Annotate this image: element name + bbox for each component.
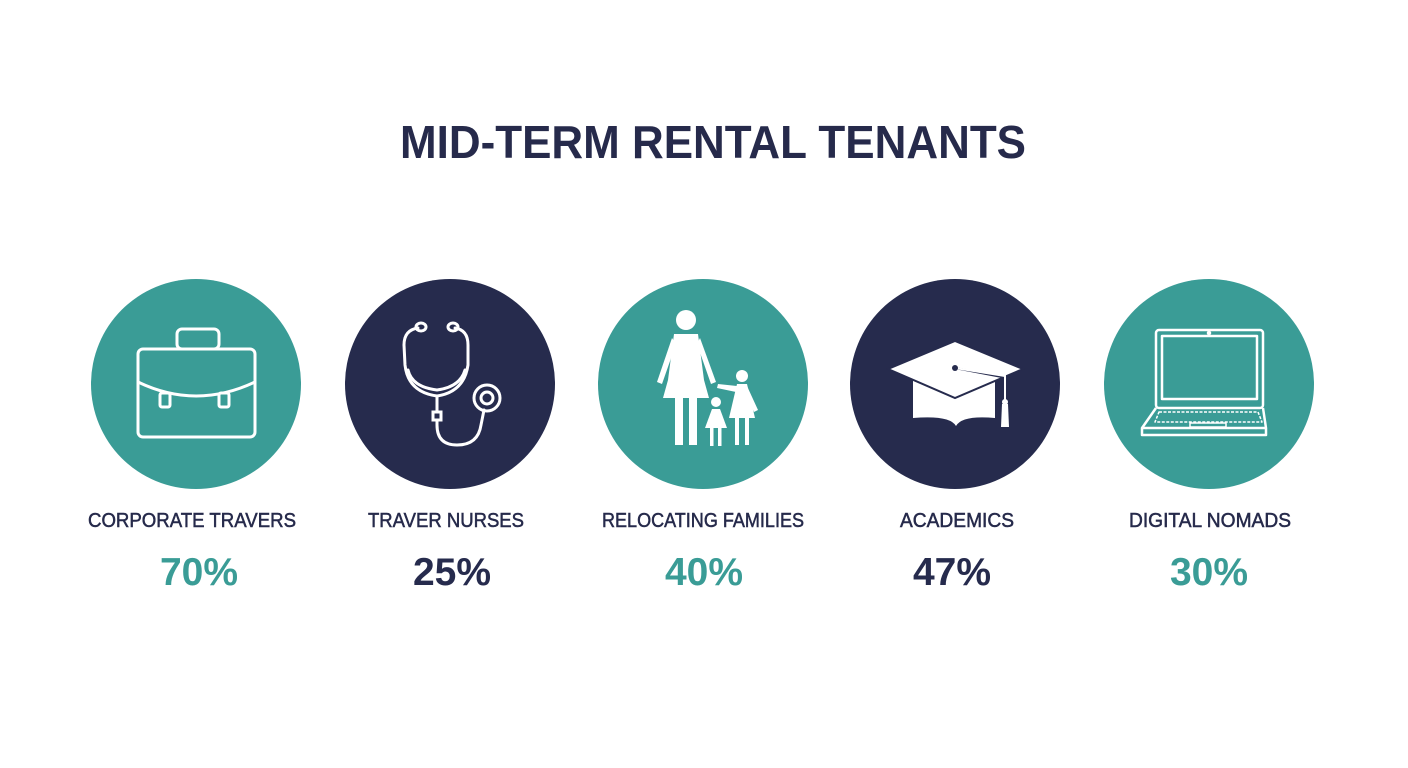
icon: family [657, 310, 758, 446]
label: families: RELOCATING FAMILIES [602, 510, 804, 532]
icon: graduation cap [888, 341, 1023, 427]
panel: corporate travelers [88, 279, 301, 594]
percent: corporate: 70% [160, 551, 238, 594]
panel: digital nomads [1104, 279, 1314, 594]
percent: nurses: 25% [413, 551, 491, 594]
panel: relocating families [598, 279, 808, 594]
percent: families: 40% [665, 551, 743, 594]
title: MID-TERM RENTAL TENANTS [400, 116, 1026, 168]
circle: corporate [91, 279, 301, 489]
panel: academics [850, 279, 1060, 594]
panel: travel nurses [345, 279, 555, 594]
percent: academics: 47% [913, 551, 991, 594]
circle: nurses [345, 279, 555, 489]
percent: nomads: 30% [1170, 551, 1248, 594]
circle: academics [850, 279, 1060, 489]
label: corporate: CORPORATE TRAVERS [88, 510, 296, 532]
label: nurses: TRAVER NURSES [368, 510, 524, 532]
icon: laptop [1142, 330, 1266, 435]
icon: briefcase [138, 329, 255, 437]
label: nomads: DIGITAL NOMADS [1129, 510, 1291, 532]
icon: stethoscope [404, 323, 500, 445]
label: academics: ACADEMICS [900, 510, 1014, 532]
circle: nomads [1104, 279, 1314, 489]
circle: families [598, 279, 808, 489]
